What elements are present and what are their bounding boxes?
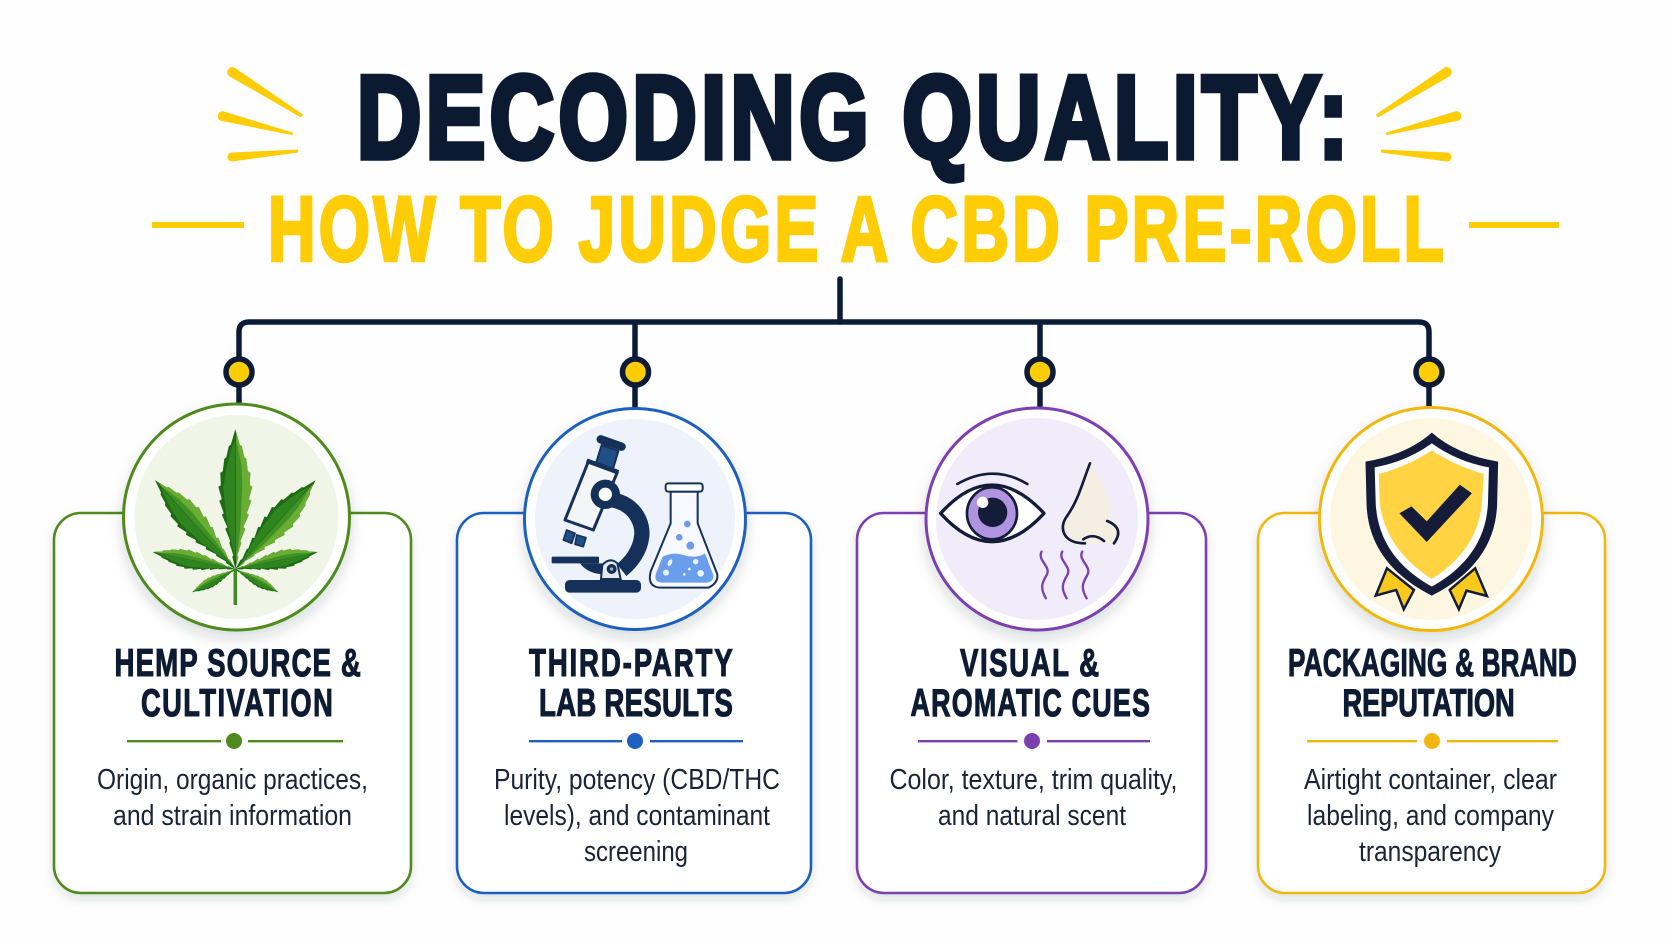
description text: [1304, 764, 1557, 868]
heading: hemp source and cultivation: HEMP SOURCE &: [114, 641, 361, 685]
description text: [494, 764, 780, 868]
icon: microscope and flask: [524, 408, 746, 630]
card outline: [54, 513, 411, 893]
heading: hemp source and cultivation: [114, 641, 361, 725]
heading: visual and aromatic cues: VISUAL &: [960, 641, 1099, 685]
divider: [1307, 733, 1558, 749]
node dot 4: [1416, 359, 1442, 385]
panel: third-party lab results: [457, 408, 811, 893]
heading: third-party lab results: LAB RESULTS: [539, 681, 733, 725]
description text: transparency: [1359, 836, 1501, 868]
description text: levels), and contaminant: [504, 800, 770, 832]
heading: packaging and brand reputation: PACKAGING & BRAND: [1288, 642, 1577, 685]
heading: Decoding Quality: DECODING QUALITY:: [357, 53, 1348, 183]
heading: visual and aromatic cues: AROMATIC CUES: [910, 682, 1150, 725]
description text: Airtight container, clear: [1304, 764, 1557, 796]
panel: visual and aromatic cues: [857, 408, 1206, 893]
icon: hemp leaf: [124, 404, 350, 630]
description text: [890, 764, 1178, 832]
description text: [97, 764, 368, 832]
description text: Origin, organic practices,: [97, 764, 368, 796]
icon: shield with check mark: [1320, 408, 1542, 630]
description text: Color, texture, trim quality,: [890, 764, 1178, 796]
heading: packaging and brand reputation: [1288, 642, 1577, 725]
heading: packaging and brand reputation: REPUTATION: [1342, 682, 1515, 725]
title block: [152, 53, 1559, 280]
icon: left sparkle rays: [218, 67, 303, 162]
divider: [529, 733, 743, 749]
description text: and natural scent: [938, 800, 1126, 832]
description text: labeling, and company: [1307, 800, 1554, 832]
node dot 1: [226, 359, 252, 385]
left subtitle rule: [152, 222, 244, 228]
panel: packaging and brand reputation: [1258, 408, 1605, 893]
heading: third-party lab results: [529, 641, 733, 725]
connector tree: [226, 279, 1442, 408]
description text: Purity, potency (CBD/THC: [494, 764, 780, 796]
icon: eye and nose: [926, 408, 1148, 630]
card outline: [1258, 513, 1605, 893]
subheading: How to judge a CBD pre-roll: HOW TO JUDGE A CBD PRE-ROLL: [268, 178, 1444, 280]
icon: right sparkle rays: [1376, 67, 1461, 162]
node dot 2: [622, 359, 648, 385]
heading: hemp source and cultivation: CULTIVATION: [141, 682, 333, 725]
heading: third-party lab results: THIRD-PARTY: [529, 641, 733, 685]
heading: visual and aromatic cues: [910, 641, 1150, 725]
description text: screening: [584, 836, 688, 868]
card outline: [857, 513, 1206, 893]
description text: and strain information: [113, 800, 352, 832]
panel: hemp source: [54, 404, 411, 893]
divider: [127, 733, 343, 749]
card outline: [457, 513, 811, 893]
right subtitle rule: [1469, 222, 1559, 228]
node dot 3: [1027, 359, 1053, 385]
divider: [918, 733, 1150, 749]
